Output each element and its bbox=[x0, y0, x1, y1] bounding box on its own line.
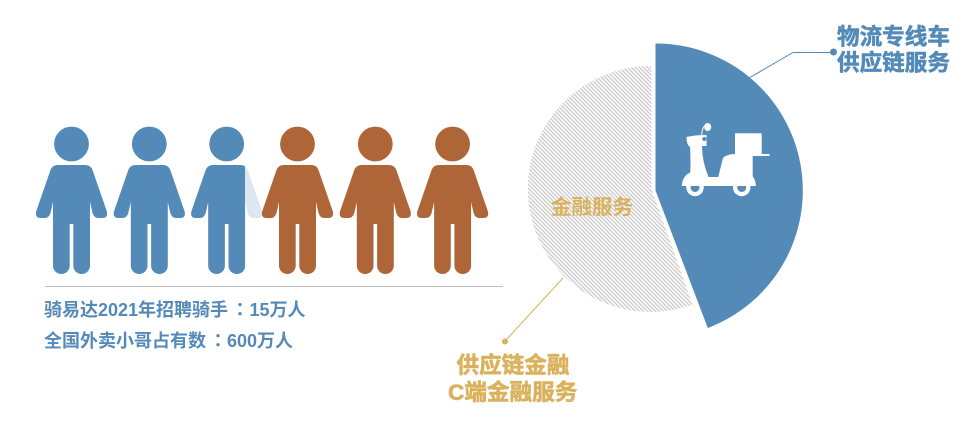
stat: recruited riders: ： bbox=[231, 296, 249, 322]
icon: delivery scooter bbox=[682, 123, 770, 196]
wheels bbox=[686, 179, 704, 196]
stat: recruited riders: 骑易达2021年招聘骑手 bbox=[44, 300, 228, 320]
slice label: 金融服务 bbox=[551, 195, 633, 219]
callout text: C端金融服务 bbox=[448, 379, 577, 405]
stat text bbox=[44, 296, 306, 353]
leader dot bbox=[502, 338, 508, 344]
slice: logistics bbox=[656, 43, 803, 328]
stat: delivery riders total: 全国外卖小哥占有数 bbox=[44, 331, 206, 351]
person 6 brown bbox=[417, 127, 488, 274]
leader dot bbox=[830, 48, 837, 56]
callout: logistics bbox=[749, 24, 950, 78]
callout text bbox=[837, 24, 950, 76]
pie chart bbox=[528, 43, 803, 328]
person 4 brown bbox=[262, 127, 333, 274]
leader line bbox=[506, 278, 563, 340]
callout text: 供应链金融 bbox=[456, 352, 569, 378]
slice: financial services bbox=[528, 66, 693, 312]
person 5 brown bbox=[340, 127, 411, 274]
callout text: 物流专线车 bbox=[837, 24, 950, 50]
person 2 blue bbox=[114, 127, 185, 274]
person 1 blue bbox=[36, 127, 107, 274]
leader line bbox=[749, 52, 833, 78]
pictogram: six riders bbox=[36, 127, 488, 274]
person 3 blue partly filled bbox=[191, 127, 262, 274]
callout: finance bbox=[448, 278, 577, 405]
callout text: 供应链服务 bbox=[837, 50, 950, 76]
stat: delivery riders total: 600万人 bbox=[227, 331, 293, 351]
stat: delivery riders total: ： bbox=[209, 327, 227, 353]
callout text bbox=[448, 352, 577, 405]
stat: recruited riders: 15万人 bbox=[250, 300, 306, 320]
